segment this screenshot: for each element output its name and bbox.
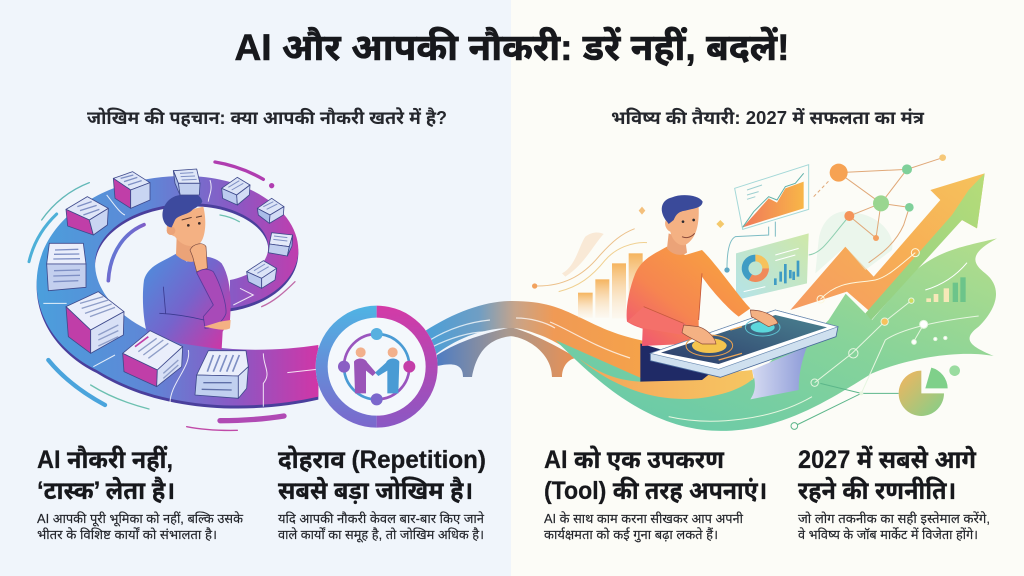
card 1 body: भीतर के विशिष्ट कार्यों को संभालता है। xyxy=(37,527,217,542)
card 2 body: यदि आपकी नौकरी केवल बार-बार किए जाने xyxy=(278,511,485,526)
card 2 heading: सबसे बड़ा जोखिम है। xyxy=(278,476,473,505)
two people shaking hands xyxy=(354,347,399,393)
growth lines on wave xyxy=(669,263,979,421)
box 7 xyxy=(247,261,277,288)
white notch under arrow xyxy=(805,292,847,343)
box 11 xyxy=(195,351,248,398)
connected ring with nodes xyxy=(338,328,415,405)
green wave xyxy=(555,238,997,431)
card 1 heading xyxy=(37,445,175,505)
card 1 body: AI आपकी पूरी भूमिका को नहीं, बल्कि उसके xyxy=(37,511,244,527)
line chart panel xyxy=(735,165,809,229)
card 4 body xyxy=(798,511,990,542)
pie chart and connector xyxy=(791,365,960,429)
card 3 body: कार्यक्षमता को कई गुना बढ़ा लकते हैं। xyxy=(544,527,718,543)
card 3: AI as a tool xyxy=(544,445,767,543)
box 4 xyxy=(222,177,250,205)
network graph xyxy=(809,154,946,273)
box 10 xyxy=(123,331,183,387)
man at tablet xyxy=(627,195,750,382)
card 3 body xyxy=(544,511,744,543)
card 2 body xyxy=(278,511,485,543)
handshake badge xyxy=(316,306,438,428)
card 4 body: वे भविष्य के जॉब मार्केट में विजेता होंगे। xyxy=(798,527,978,542)
right subheading: भविष्य की तैयारी: 2027 में सफलता का मंत्र xyxy=(611,107,925,128)
gold and orange ribbon under tablet xyxy=(579,358,754,399)
card 3 body: AI के साथ काम करना सीखकर आप अपनी xyxy=(544,511,744,526)
left illustration: repetitive task loop xyxy=(29,162,438,430)
card 3 heading xyxy=(544,445,767,505)
rising arrow xyxy=(790,173,985,320)
card 4 heading: 2027 में सबसे आगे xyxy=(798,445,977,474)
donut chart xyxy=(745,258,766,279)
box 2 xyxy=(66,197,108,235)
card 4: 2027 strategy xyxy=(798,445,990,542)
mini bar chart xyxy=(926,277,966,302)
box 9 xyxy=(66,292,124,353)
faded bars and curves behind man xyxy=(532,207,724,318)
card 1 heading: ‘टास्क’ लेता है। xyxy=(37,476,175,505)
box 8 xyxy=(47,243,86,291)
card 2 body: वाले कार्यों का समूह है, तो जोखिम अधिक है। xyxy=(278,527,484,543)
title: AI और आपकी नौकरी: डरें नहीं, बदलें! xyxy=(234,26,790,68)
tablet on pedestal xyxy=(650,310,838,399)
box 1 xyxy=(113,172,150,208)
task loop ring xyxy=(37,176,318,409)
task boxes on loop xyxy=(47,169,293,398)
card 2 heading: दोहराव (Repetition) xyxy=(278,445,486,474)
card 1 heading: AI नौकरी नहीं, xyxy=(37,445,173,474)
bridge connecting left and right xyxy=(425,301,644,382)
right illustration: AI tool and growth xyxy=(532,154,997,431)
connector lines between panels xyxy=(727,222,775,268)
card 4 heading: रहने की रणनीति। xyxy=(798,476,956,505)
left subheading: जोखिम की पहचान: क्या आपकी नौकरी खतरे में है? xyxy=(87,107,447,128)
box 6 xyxy=(268,233,293,256)
pedestal xyxy=(750,347,807,399)
card 4 heading xyxy=(798,445,977,505)
card 1 body xyxy=(37,511,244,542)
box 5 xyxy=(257,198,284,223)
card 3 heading: (Tool) की तरह अपनाएं। xyxy=(544,476,767,505)
motion strokes around loop xyxy=(29,162,295,430)
card 1: AI takes tasks xyxy=(37,445,244,542)
hands xyxy=(682,325,716,344)
card 3 heading: AI को एक उपकरण xyxy=(544,445,725,474)
card 4 body: जो लोग तकनीक का सही इस्तेमाल करेंगे, xyxy=(798,511,990,526)
dashboard panel xyxy=(736,233,809,300)
card 2: repetition risk xyxy=(278,445,486,543)
card 2 heading xyxy=(278,445,486,505)
box 3 xyxy=(173,169,200,195)
man thinking xyxy=(143,193,231,349)
